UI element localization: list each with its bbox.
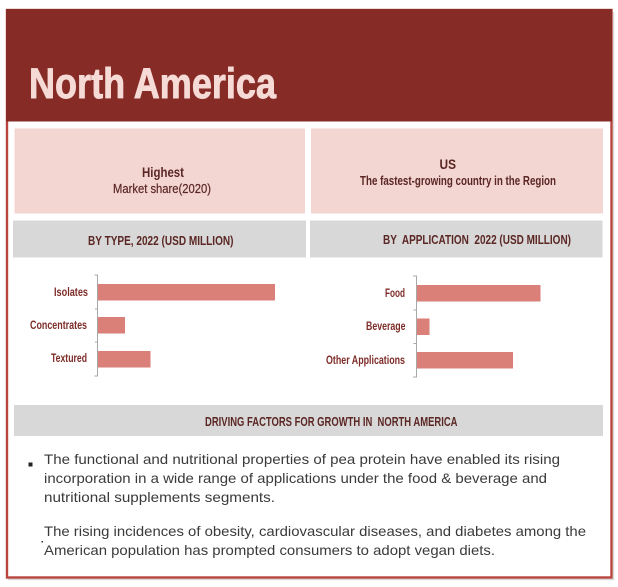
title: North America (29, 60, 277, 108)
label: beverage: Beverage (366, 321, 406, 333)
text block: driving factor one: The functional and nutritional properties of pea protein have enabled its rising (44, 451, 560, 467)
label: food: Food (385, 288, 405, 300)
text block: driving factor one (28, 451, 560, 505)
text block: driving factor two (42, 523, 586, 558)
text block: driving factor two: American population has prompted consumers to adopt vegan diets. (44, 542, 495, 558)
icon: small dot bullet (42, 541, 43, 542)
heading: highest: Highest (142, 164, 184, 180)
label: other applications: Other Applications (326, 355, 405, 367)
panel: highest market share (14, 128, 305, 214)
bar: isolates (98, 284, 275, 300)
label: isolates: Isolates (54, 287, 88, 299)
bar chart: by type (30, 275, 275, 376)
bar: textured (98, 351, 150, 368)
bar: beverage (417, 318, 430, 335)
text block: driving factor one: nutritional supplements segments. (44, 489, 275, 505)
text: market share: Market share(2020) (113, 182, 211, 196)
label: textured: Textured (51, 353, 87, 365)
icon: square bullet (28, 462, 32, 466)
bar chart: by application (326, 276, 540, 377)
bar: concentrates (98, 317, 125, 334)
bar: other applications (417, 352, 513, 368)
heading band: driving factors: DRIVING FACTORS FOR GROWTH IN NORTH AMERICA (205, 415, 458, 429)
heading: US: US (440, 156, 456, 172)
text block: driving factor one: incorporation in a wide range of applications under the food & beverage and (44, 470, 547, 486)
label: concentrates: Concentrates (30, 320, 87, 332)
heading band: by application (310, 220, 602, 258)
heading band: by type (13, 220, 306, 258)
text block: driving factor two: The rising incidences of obesity, cardiovascular diseases, and diabetes among the (44, 523, 586, 539)
text: fastest-growing country: The fastest-growing country in the Region (360, 174, 556, 188)
heading band: by type: BY TYPE, 2022 (USD MILLION) (88, 234, 234, 248)
bar: food (417, 285, 540, 302)
panel: fastest-growing country (311, 128, 603, 214)
heading band: by application: BY APPLICATION 2022 (USD MILLION) (383, 233, 571, 247)
header banner (6, 9, 612, 122)
heading band: driving factors (14, 405, 603, 436)
